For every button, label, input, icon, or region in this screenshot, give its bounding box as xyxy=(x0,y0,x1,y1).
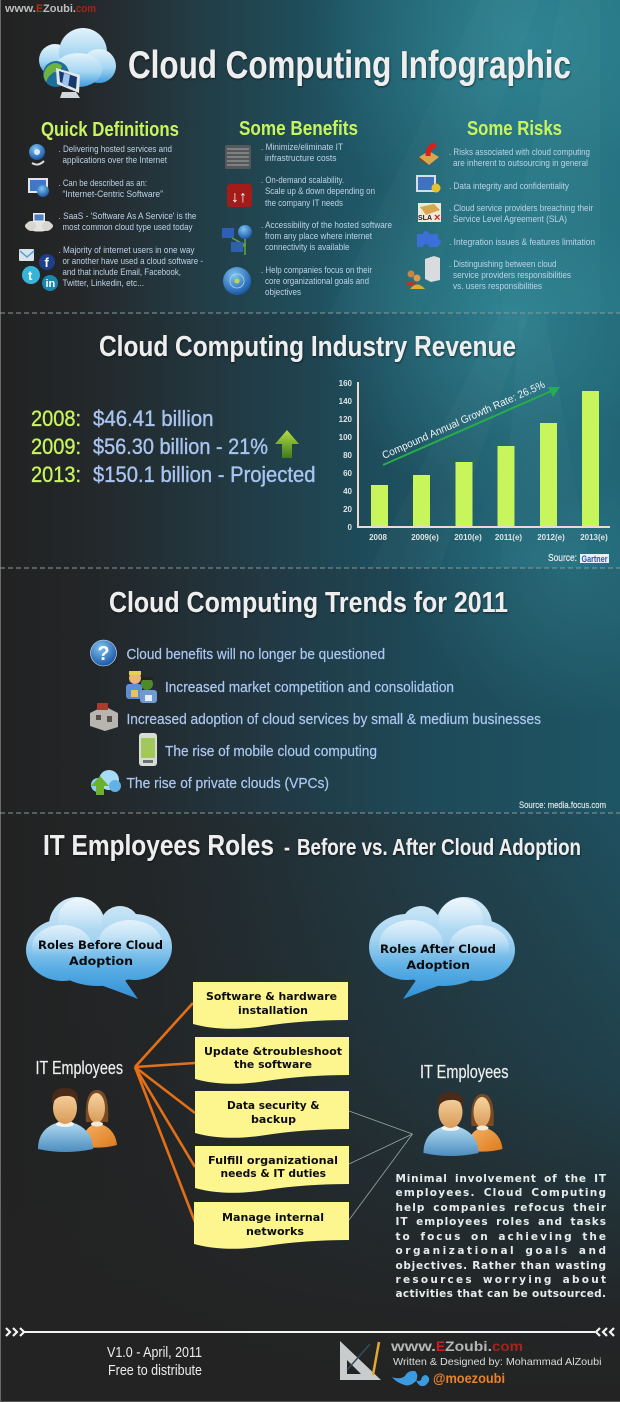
definition 1 xyxy=(58,144,172,166)
credit: website: www. xyxy=(390,1338,436,1354)
icon: twitter birds xyxy=(392,1371,429,1386)
risk 1: are inherent to outsourcing in general xyxy=(453,158,588,169)
speech cloud: roles after: Roles After Cloud xyxy=(380,942,496,956)
text block: minimal involvement: Minimal involvement of the IT xyxy=(396,1173,607,1185)
risk 5: . Distinguishing between cloud xyxy=(449,259,556,270)
icon: mobile phone xyxy=(139,733,157,766)
role note: internal networks xyxy=(194,1202,349,1249)
icon: red switch box xyxy=(419,145,439,165)
risk 3 xyxy=(449,203,593,225)
text block: minimal involvement: organizational goals and xyxy=(396,1245,606,1257)
panel: trends list xyxy=(90,640,541,795)
definition 2 xyxy=(58,178,163,200)
bar chart: revenue by year xyxy=(339,379,610,542)
text block: minimal involvement: help companies refocus their xyxy=(396,1202,607,1214)
bar chart: revenue by year: 2011(e) xyxy=(495,533,522,542)
risk 5 xyxy=(449,259,571,292)
connectors: grey after-adoption lines xyxy=(349,1111,412,1220)
benefit 3: . Accessibility of the hosted software xyxy=(261,220,392,231)
benefit 4: objectives xyxy=(265,287,301,298)
definition 4 xyxy=(58,245,203,289)
definition 4: Twitter, Linkedin, etc... xyxy=(62,278,144,289)
text block: minimal involvement: to focus on achieving the xyxy=(396,1231,606,1243)
trend 3: Increased adoption of cloud services by small & medium businesses xyxy=(126,711,541,728)
benefit 1: infrastructure costs xyxy=(265,153,337,164)
label: IT employees after: IT Employees xyxy=(420,1062,508,1082)
benefit 2: . On-demand scalability. xyxy=(261,175,344,186)
role note: internal networks: networks xyxy=(246,1225,304,1238)
revenue figures: 2013: xyxy=(31,462,81,487)
speech cloud: roles before xyxy=(26,897,172,999)
risk 3: . Cloud service providers breaching their xyxy=(449,203,593,214)
role note: software and hardware: installation xyxy=(238,1004,308,1017)
icon: SLA document: SLA xyxy=(418,215,432,222)
role note: data security xyxy=(195,1091,349,1138)
bar chart: revenue by year: 140 xyxy=(339,397,353,406)
growth rate label: Compound Annual Growth Rate: 26.5% xyxy=(380,379,547,462)
revenue figures: 2009: xyxy=(31,434,81,459)
site logo: www.EZoubi.com: E xyxy=(36,3,43,15)
benefit 1: . Minimize/eliminate IT xyxy=(261,142,343,153)
role note: data security: Data security & xyxy=(227,1099,320,1112)
definition 4: . Majority of internet users in one way xyxy=(58,245,195,256)
heading: trends: Cloud Computing Trends for 2011 xyxy=(109,587,508,619)
icon: SLA document: × xyxy=(434,212,440,224)
role note: update and troubleshoot xyxy=(195,1037,349,1084)
trend 4: The rise of mobile cloud computing xyxy=(165,743,377,760)
icon: monitor with globe xyxy=(28,178,49,197)
definition 3: . SaaS - 'Software As A Service' is the xyxy=(58,211,196,222)
icon: monitor with lock xyxy=(416,175,440,192)
speech cloud: roles before: Roles Before Cloud xyxy=(38,938,163,952)
icon: linkedin: in xyxy=(46,278,56,290)
heading: IT employees roles: IT Employees Roles xyxy=(43,830,274,862)
role note: organizational needs: needs & IT duties xyxy=(220,1167,326,1180)
bar chart: revenue by year: 2010(e) xyxy=(454,533,482,542)
text block: minimal involvement: employees. Cloud Computing xyxy=(396,1187,606,1199)
revenue figures: $46.41 billion xyxy=(93,406,214,431)
role note: data security: backup xyxy=(251,1113,296,1126)
definition 3: most common cloud type used today xyxy=(62,222,193,233)
source: Gartner xyxy=(548,553,609,564)
icon: facebook xyxy=(39,254,55,270)
panel: some risks xyxy=(405,118,595,292)
trend 2: Increased market competition and consolidation xyxy=(165,679,454,696)
bar chart: revenue by year: 20 xyxy=(343,505,353,514)
icon: puzzle xyxy=(417,231,441,247)
panel: quick definitions xyxy=(19,119,203,291)
role note: internal networks: Manage internal xyxy=(222,1211,324,1224)
icon: employees after xyxy=(424,1092,502,1156)
role note: organizational needs: Fulfill organizational xyxy=(208,1154,338,1167)
benefit 2 xyxy=(261,175,375,209)
source: Gartner: Source: xyxy=(548,553,577,564)
bar chart: revenue by year: 60 xyxy=(343,469,353,478)
icon: server and users xyxy=(405,256,440,289)
benefit 1 xyxy=(261,142,343,164)
panel: some benefits xyxy=(222,118,392,298)
definition 1: . Delivering hosted services and xyxy=(58,144,172,155)
heading: Some Benefits xyxy=(239,118,358,140)
icon: question mark xyxy=(90,640,116,666)
icon: scale up and down: ↓↑ xyxy=(231,189,247,206)
version note: Free to distribute xyxy=(108,1363,202,1379)
icon: competitors xyxy=(126,671,157,703)
footer rule with chevrons xyxy=(6,1328,614,1336)
icon: building xyxy=(90,703,118,731)
credit: twitter handle: @moezoubi xyxy=(433,1370,505,1386)
role note: organizational needs xyxy=(195,1146,349,1193)
heading: Some Risks xyxy=(467,118,562,140)
text block: minimal involvement xyxy=(396,1173,607,1300)
role note: update and troubleshoot: the software xyxy=(234,1058,312,1071)
risk 2: . Data integrity and confidentiality xyxy=(449,181,569,192)
benefit 4 xyxy=(261,265,372,298)
icon: facebook: f xyxy=(44,255,50,270)
bar chart: revenue by year: 160 xyxy=(339,379,353,388)
heading: IT employees roles xyxy=(43,830,581,862)
icon: scale up and down xyxy=(227,184,252,207)
risk 1 xyxy=(449,147,590,169)
revenue figures xyxy=(31,406,316,487)
revenue figures: 2008: xyxy=(31,406,81,431)
icon: question mark: ? xyxy=(97,643,110,665)
bar chart: revenue by year: 40 xyxy=(343,487,353,496)
benefit 4: . Help companies focus on their xyxy=(261,265,372,276)
benefit 3 xyxy=(261,220,392,253)
site logo: www.EZoubi.com: Zoubi. xyxy=(43,3,76,15)
benefit 3: from any place where internet xyxy=(265,231,372,242)
benefit 2: the company IT needs xyxy=(265,198,343,209)
revenue figures: $56.30 billion - 21% xyxy=(93,434,268,459)
bar chart: revenue by year: 80 xyxy=(343,451,353,460)
icon: twitter: t xyxy=(28,268,33,283)
bar chart: revenue by year: 2008 xyxy=(369,533,387,542)
credit: author: Written & Designed by: Mohammad AlZoubi xyxy=(393,1356,602,1368)
icon: up arrow xyxy=(275,430,299,458)
risk 3: Service Level Agreement (SLA) xyxy=(453,214,567,225)
speech cloud: roles after xyxy=(369,897,515,999)
speech cloud: roles after: Adoption xyxy=(406,958,470,972)
speech cloud: roles before: Adoption xyxy=(69,954,133,968)
icon: cloud with arrow xyxy=(91,770,121,795)
definition 4: or another have used a cloud software - xyxy=(62,256,203,267)
icon: laptop on cloud xyxy=(25,213,53,232)
credit: website: E xyxy=(436,1338,445,1354)
role note: software and hardware xyxy=(193,982,348,1029)
risk 5: vs. users responsibilities xyxy=(453,281,542,292)
risk 1: . Risks associated with cloud computing xyxy=(449,147,590,158)
site logo: www.EZoubi.com: com xyxy=(76,3,96,15)
icon: SLA document xyxy=(418,203,441,224)
text block: minimal involvement: IT employees roles and tasks xyxy=(396,1216,606,1228)
benefit 3: connectivity is available xyxy=(265,242,350,253)
text block: minimal involvement: resources worrying about xyxy=(396,1274,606,1286)
risk 5: service providers responsibilities xyxy=(453,270,571,281)
heading: industry revenue: Cloud Computing Industry Revenue xyxy=(99,331,516,363)
credit: website: com xyxy=(492,1338,523,1354)
version note xyxy=(107,1345,202,1379)
icon: drafting tools xyxy=(340,1341,381,1380)
icon: mail xyxy=(19,249,34,261)
growth arrow xyxy=(383,387,560,465)
label: IT employees before: IT Employees xyxy=(36,1058,123,1078)
role note: software and hardware: Software & hardware xyxy=(206,990,337,1003)
risk 4: . Integration issues & features limitation xyxy=(449,237,595,248)
version note: V1.0 - April, 2011 xyxy=(107,1345,202,1361)
benefit 2: Scale up & down depending on xyxy=(265,186,375,197)
icon: cloud with globe and monitor xyxy=(39,28,116,98)
icon: target globe xyxy=(223,267,251,295)
credit: website xyxy=(390,1338,523,1354)
revenue figures: $150.1 billion - Projected xyxy=(93,462,316,487)
icon: twitter xyxy=(22,266,40,284)
text block: minimal involvement: objectives. Rather than wasting xyxy=(396,1260,606,1272)
role note: update and troubleshoot: Update &troubleshoot xyxy=(204,1045,342,1058)
definition 1: applications over the Internet xyxy=(62,155,167,166)
definition 2: “Internet-Centric Software” xyxy=(62,189,163,200)
bar chart: revenue by year: 2013(e) xyxy=(580,533,608,542)
bar chart: revenue by year: 120 xyxy=(339,415,353,424)
bar chart: revenue by year: 2009(e) xyxy=(411,533,439,542)
definition 2: . Can be described as an: xyxy=(58,178,147,189)
text block: minimal involvement: activities that can be outsourced. xyxy=(396,1288,606,1300)
site logo: www.EZoubi.com xyxy=(4,3,96,15)
icon: network xyxy=(222,225,252,255)
icon: linkedin xyxy=(42,275,58,291)
definition 4: and that include Email, Facebook, xyxy=(62,267,181,278)
icon: globe with plug xyxy=(29,144,45,165)
trend 5: The rise of private clouds (VPCs) xyxy=(126,775,329,792)
connectors: orange role lines xyxy=(135,1003,195,1222)
credit: website: Zoubi. xyxy=(445,1338,492,1354)
heading: IT employees roles: - xyxy=(284,834,290,860)
icon: employees before xyxy=(38,1088,117,1152)
trend 1: Cloud benefits will no longer be questioned xyxy=(126,646,385,663)
benefit 4: core organizational goals and xyxy=(265,276,369,287)
icon: server xyxy=(225,145,251,169)
bar chart: revenue by year: 2012(e) xyxy=(537,533,565,542)
definition 3 xyxy=(58,211,196,233)
heading: Quick Definitions xyxy=(41,119,179,141)
bar chart: revenue by year: 0 xyxy=(348,523,353,532)
site logo: www.EZoubi.com: www. xyxy=(4,3,36,15)
source: Gartner: Gartner xyxy=(582,554,608,564)
bar chart: revenue by year: 100 xyxy=(339,433,353,442)
